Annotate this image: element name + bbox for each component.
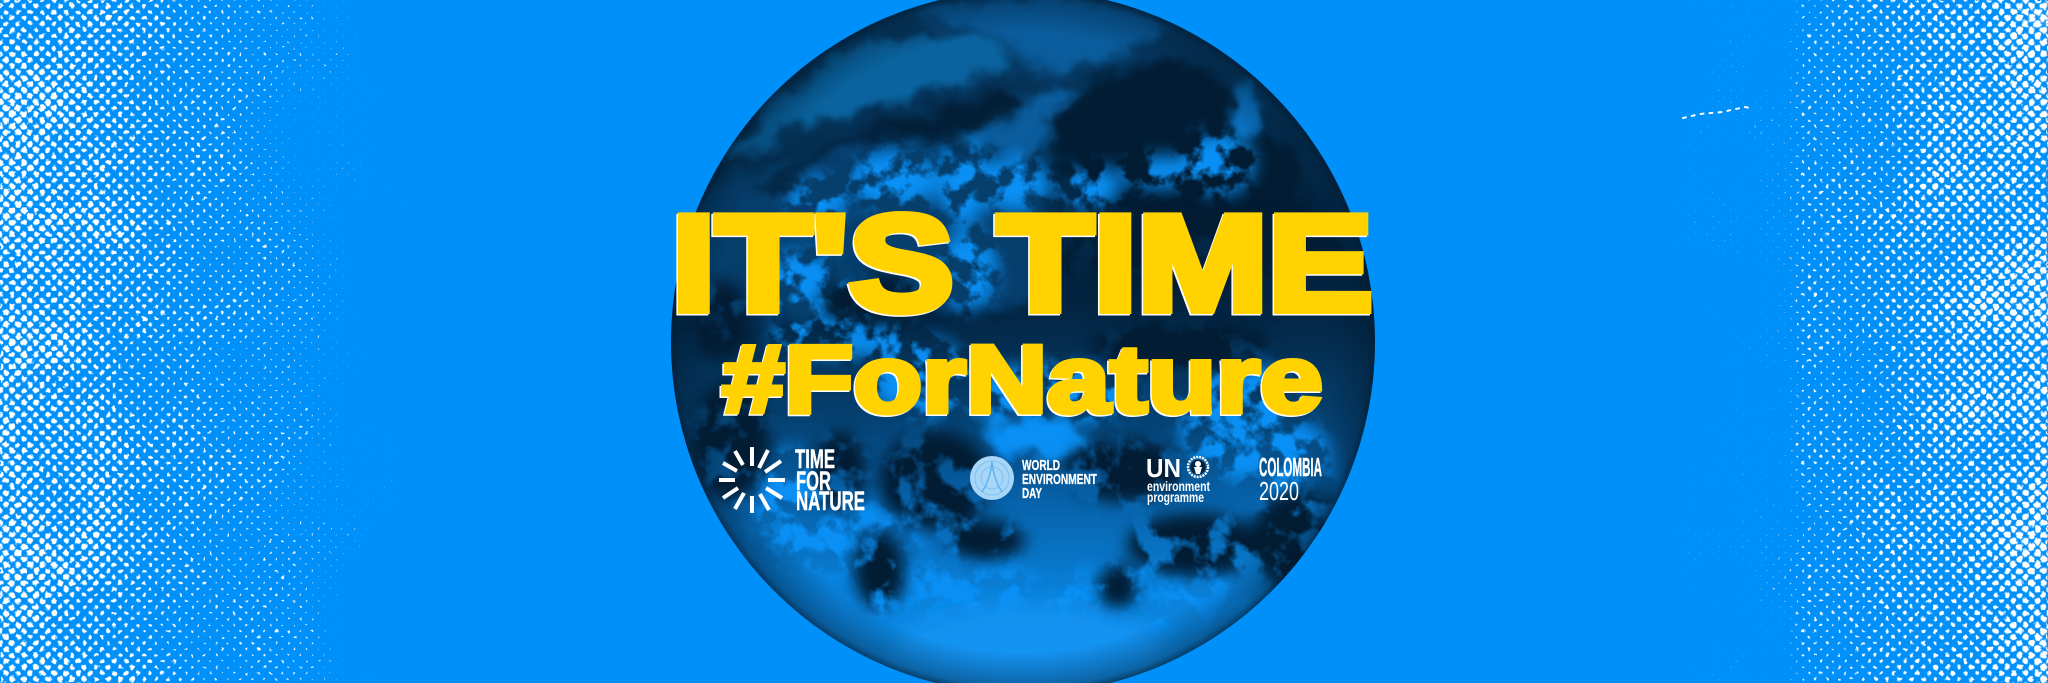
wordmark: ENVIRONMENT [1022, 471, 1097, 488]
title: IT'S TIME: IT'S TIME [670, 188, 1372, 340]
logo: UN environment programme [1146, 453, 1210, 505]
bright bottom of the globe [905, 597, 1148, 662]
wordmark: WORLD [1022, 457, 1060, 474]
logo: Colombia 2020: 2020 [1259, 476, 1299, 506]
clear bright ocean patch [989, 416, 1081, 456]
wordmark: DAY [1022, 485, 1042, 502]
wordmark [1022, 457, 1097, 502]
wordmark: NATURE [796, 486, 865, 516]
scattered dark weather systems [690, 210, 1350, 611]
logo: World Environment Day [970, 456, 1097, 502]
icon: UNEP emblem [1188, 457, 1208, 477]
icon: sunburst [719, 447, 785, 513]
logo: Colombia 2020 [1259, 452, 1322, 506]
banner: COLOMBIA [1259, 452, 1322, 482]
logo: UN environment programme: programme [1147, 489, 1204, 505]
halftone texture: right edge [1640, 0, 2048, 683]
speck streak [1683, 107, 1750, 118]
logo: Time for Nature [719, 444, 865, 516]
wordmark: TIME [795, 444, 835, 474]
logo: UN environment programme: UN [1146, 453, 1181, 483]
scattered bright clouds [754, 131, 1334, 634]
halftone texture: left edge [0, 0, 420, 683]
globe rim shading [660, 0, 1390, 683]
globe [660, 0, 1390, 683]
hashtag: #ForNature: #ForNature [722, 326, 1323, 433]
hashtag: #ForNature: #ForNature [720, 328, 1322, 434]
title: IT'S TIME: IT'S TIME [672, 187, 1373, 339]
logo: UN environment programme: environment [1147, 478, 1210, 494]
land masses [685, 0, 1340, 320]
wordmark: FOR [796, 466, 831, 496]
wordmark [795, 444, 865, 516]
icon: fingerprint globe [970, 456, 1014, 500]
